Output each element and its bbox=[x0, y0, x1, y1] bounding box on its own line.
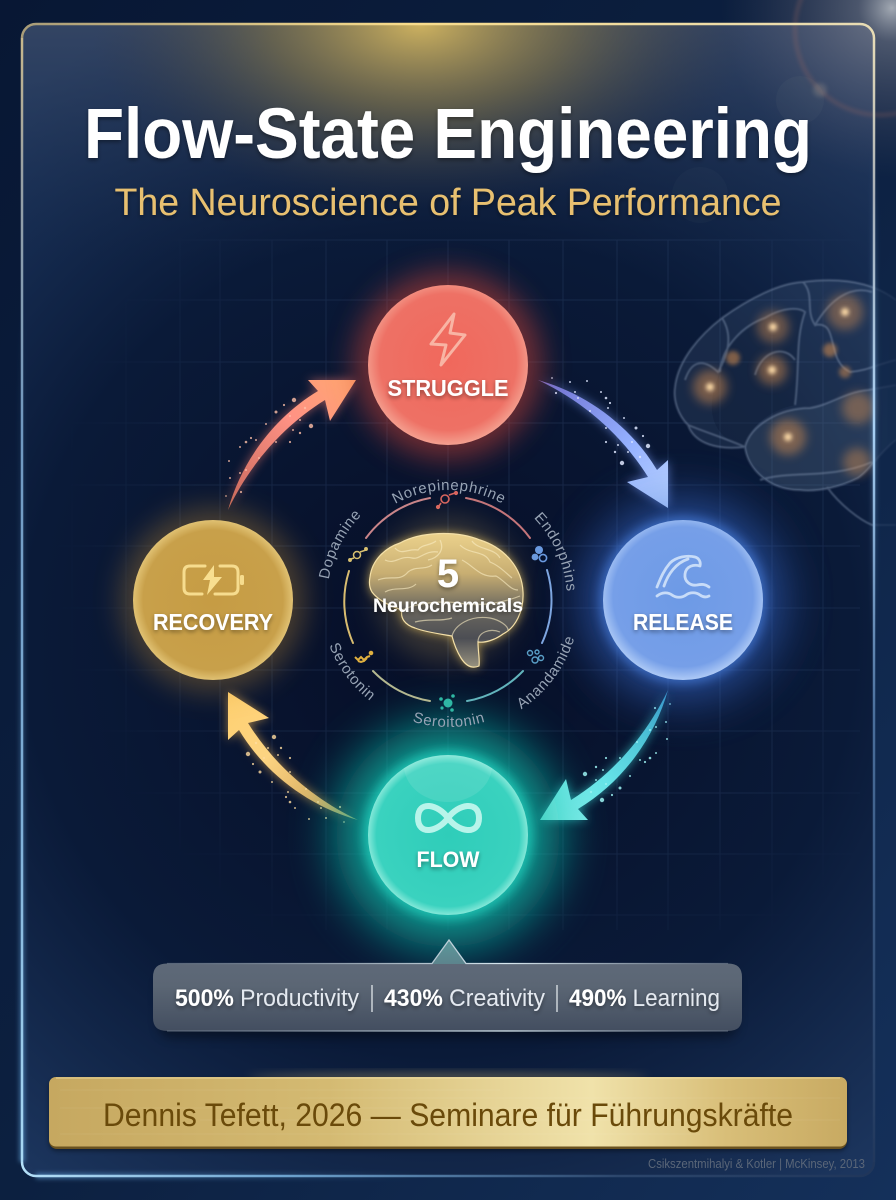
chemical labels: Anandamide bbox=[518, 637, 574, 710]
icon: infinity bbox=[418, 806, 479, 830]
plaque text: Dennis Tefett, 2026 — Seminare für Führungskräfte bbox=[103, 1097, 793, 1133]
icon: serotonin molecule bbox=[355, 652, 372, 662]
footer plaque bbox=[49, 1073, 847, 1151]
chemical labels: Dopamine bbox=[318, 512, 360, 578]
label: release: RELEASE bbox=[633, 609, 733, 635]
icon: lightning bolt bbox=[431, 314, 465, 365]
node: flow bbox=[336, 723, 560, 947]
icon: endorphins molecule bbox=[532, 546, 547, 562]
stat: learning: 490% Learning bbox=[569, 985, 720, 1012]
arrow: recovery to struggle bbox=[225, 380, 356, 510]
subtitle: The Neuroscience of Peak Performance bbox=[114, 182, 782, 224]
icon: seroitonin molecule bbox=[439, 694, 455, 712]
icon: battery bbox=[184, 565, 244, 595]
label: struggle: STRUGGLE bbox=[388, 375, 508, 401]
arrow: release to flow bbox=[540, 690, 671, 820]
stats callout bbox=[153, 940, 742, 1038]
lens flare bbox=[672, 0, 896, 223]
node: release bbox=[583, 500, 783, 700]
icon: dopamine molecule bbox=[349, 548, 367, 561]
arrow: struggle to release bbox=[538, 377, 668, 508]
chemical labels: Norepinephrine bbox=[392, 480, 504, 504]
citation: Csikszentmihalyi & Kotler | McKinsey, 2013 bbox=[648, 1156, 865, 1171]
chemical labels bbox=[318, 480, 574, 727]
label: recovery: RECOVERY bbox=[153, 609, 273, 635]
chemical labels: Endorphins bbox=[534, 512, 574, 591]
node: struggle bbox=[354, 271, 542, 459]
central label: Neurochemicals bbox=[373, 596, 523, 617]
stat: creativity: 430% Creativity bbox=[384, 985, 545, 1012]
central count: 5 bbox=[437, 552, 459, 596]
icon: norepinephrine molecule bbox=[437, 492, 457, 508]
stat: productivity: 500% Productivity bbox=[175, 985, 359, 1012]
icon: translucent brain with glowing nodes bbox=[675, 280, 896, 525]
node: recovery bbox=[121, 508, 305, 692]
title: Flow-State Engineering bbox=[84, 95, 812, 174]
chemical labels: Seroitonin bbox=[414, 712, 484, 727]
arrow: flow to recovery bbox=[228, 692, 358, 823]
label: flow: FLOW bbox=[416, 847, 480, 872]
chemical labels: Serotonin bbox=[330, 643, 374, 700]
icon: anandamide molecule bbox=[528, 650, 544, 663]
central brain bbox=[369, 518, 523, 667]
icon: wave bbox=[657, 556, 709, 597]
neurochemical ring bbox=[318, 480, 574, 727]
